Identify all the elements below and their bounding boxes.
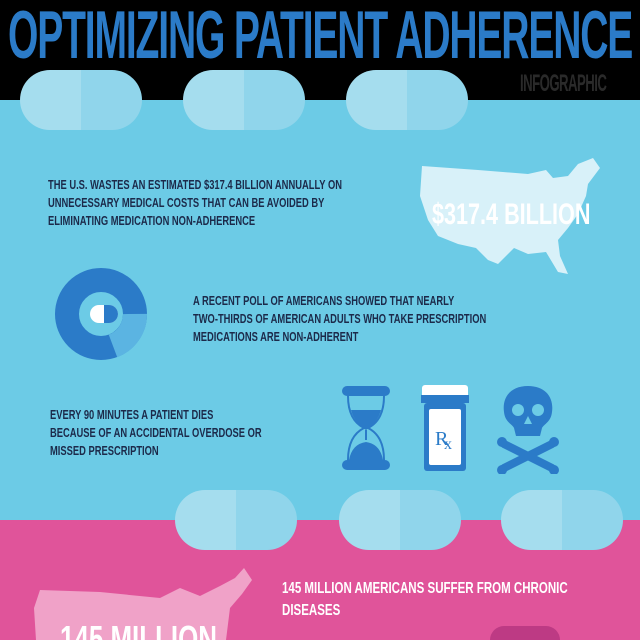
icon: skull and crossbones: [497, 386, 559, 474]
donut chart: [55, 268, 147, 360]
text: overdose: MISSED PRESCRIPTION: [50, 443, 159, 458]
text: poll: MEDICATIONS ARE NON-ADHERENT: [193, 329, 358, 344]
US map with amount: $317.4 BILLION: [432, 198, 590, 231]
text: chronic diseases: 145 MILLION AMERICANS SUFFER FROM CHRONIC: [282, 580, 568, 597]
text: overdose: EVERY 90 MINUTES A PATIENT DIES: [50, 407, 213, 422]
pink section: [0, 520, 640, 640]
text: waste: UNNECESSARY MEDICAL COSTS THAT CAN BE AVOIDED BY: [48, 195, 324, 210]
icon: pill bottle: x: [444, 436, 452, 453]
text: chronic diseases: DISEASES: [282, 602, 340, 619]
text: overdose: [50, 407, 262, 458]
US map with amount: [420, 158, 600, 274]
pink US map with figure: [34, 568, 252, 640]
icon: hourglass: [342, 386, 390, 470]
text: waste: ELIMINATING MEDICATION NON-ADHERENCE: [48, 213, 255, 228]
text: waste: THE U.S. WASTES AN ESTIMATED $317.4 BILLION ANNUALLY ON: [48, 177, 342, 192]
header band: [0, 0, 640, 100]
text: overdose: BECAUSE OF AN ACCIDENTAL OVERDOSE OR: [50, 425, 262, 440]
dark pink circle: [490, 626, 560, 640]
text: poll: A RECENT POLL OF AMERICANS SHOWED THAT NEARLY: [193, 293, 454, 308]
text: waste: [48, 177, 342, 228]
top pills: [20, 70, 468, 130]
text: poll: [193, 293, 486, 344]
icon: pill bottle: [421, 385, 469, 471]
icon: pill bottle: R: [435, 428, 449, 450]
text: chronic diseases: [282, 580, 568, 619]
text: poll: TWO-THIRDS OF AMERICAN ADULTS WHO TAKE PRESCRIPTION: [193, 311, 486, 326]
bottom pills: [175, 490, 623, 550]
